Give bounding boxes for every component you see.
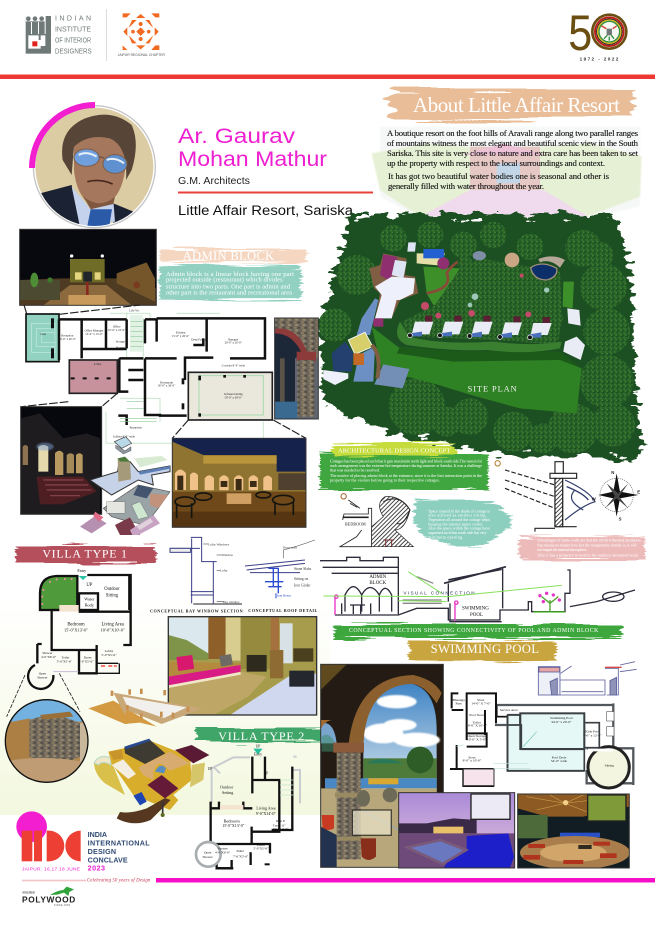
- room labels: 13'-0" x 13'-0": [85, 332, 103, 336]
- logo: Jaipur regional chapter: [118, 13, 166, 57]
- outer trees: [318, 222, 635, 453]
- room labels: Office: [113, 325, 121, 329]
- hedge: [397, 322, 562, 352]
- pale landscape lines: [106, 312, 263, 443]
- description: [387, 128, 639, 191]
- foundation model: [88, 689, 202, 727]
- pool floor plan: 54'-0" wide: [551, 759, 567, 763]
- faint villa background wash: [0, 600, 330, 815]
- isometric admin model: [80, 437, 170, 535]
- conclave title: 2023: [88, 865, 105, 873]
- sketch captions: CONCEPTUAL BAY WINDOW SECTION: [150, 609, 243, 614]
- logo: Indian Institute of Interior Designers: OF INTERIOR: [55, 37, 91, 44]
- lobby: [69, 360, 117, 393]
- site plan label: SITE PLAN: [468, 384, 517, 393]
- shade description: minimum opening.: [428, 534, 463, 539]
- shade text brush: [415, 500, 512, 545]
- photo: lobby night: [21, 407, 102, 514]
- room labels: 50'-0" x 28'-0": [225, 395, 243, 399]
- roof detail sketch: Slope with: [283, 545, 297, 549]
- icon: compass: N: [611, 470, 614, 475]
- photo leader lines: [22, 305, 306, 438]
- villa 2 plan: Rest 6': [276, 819, 286, 823]
- cottages: [408, 308, 585, 360]
- room labels: Reception: [61, 334, 74, 338]
- footer thin line: [22, 880, 86, 881]
- room labels: Restaurant: [160, 380, 173, 384]
- villa 2 plan: Toilet: [236, 849, 244, 853]
- conclave title: CONCLAVE: [88, 856, 128, 864]
- shade description: also utilised as outdoor sitting.: [428, 513, 487, 518]
- roof detail sketch: Stone Slabs: [294, 567, 312, 571]
- photo: arch view: [321, 664, 443, 867]
- villa 2 plan: 5'-0"X5'-6": [253, 847, 269, 851]
- panel: swimming pool: [321, 662, 637, 869]
- section caption: CONCEPTUAL SECTION SHOWING CONNECTIVITY OF POOL AND ADMIN BLOCK: [349, 628, 599, 634]
- pool floor plan: Service Area: [500, 708, 518, 712]
- panel: admin block: [20, 229, 318, 527]
- photo: amphitheatre at night: [518, 794, 630, 869]
- villa 1 plan: Open: [39, 671, 46, 675]
- pool floor plan: Open Storage: [467, 734, 487, 738]
- icon: compass: S: [619, 517, 622, 522]
- pool floor plan: Toilet: [473, 720, 481, 724]
- wall description: that means no matter how hot the temperature outside is, it will: [537, 542, 637, 548]
- stairs: [120, 322, 157, 422]
- logo: Indian Institute of Interior Designers: [26, 16, 92, 55]
- sponsor: Polywood: POLYWOOD: [22, 894, 75, 904]
- room labels: Reception: [130, 425, 142, 429]
- shade description: Space created in the shade of cottage is: [428, 508, 490, 513]
- admin description: [166, 271, 294, 297]
- tree mass: [320, 215, 645, 458]
- villa 1 plan: Lobby: [105, 649, 114, 653]
- room labels: Corridor 8'-0" wide: [222, 364, 246, 368]
- pool floor plan: 7'-0" x 12'-0": [583, 733, 602, 737]
- panel: villa type 1: [7, 537, 318, 727]
- villa 1 plan: Dress: [84, 656, 92, 660]
- villa 2 plan: UP: [264, 771, 268, 775]
- room labels: Lobby: [94, 362, 102, 366]
- room labels: Softened sitting: [224, 392, 243, 396]
- villa 1 plan: 5'-6"X5'-6": [57, 660, 73, 664]
- concept description: property for the visitors before going to their respective cottages.: [330, 478, 440, 483]
- section caption brush: [335, 624, 622, 638]
- pool floor plan: Kids Pool: [585, 730, 599, 734]
- red path: [427, 262, 458, 293]
- sunglasses: [74, 149, 99, 166]
- villa 2 plan: Setting: [222, 790, 233, 795]
- villa 1 plan: 5'-6"X5'-6": [78, 660, 94, 664]
- swimming pool brush: [409, 642, 556, 661]
- room labels: [41, 309, 246, 439]
- pool floor plan: 10'-0" X 10'-0": [466, 724, 488, 728]
- logo: 50 years: 1972 - 2022: [580, 56, 619, 61]
- pool sketch: [538, 662, 637, 695]
- villa 1 plan: Shower: [42, 651, 53, 655]
- shade description: organised such that south side has very: [428, 530, 487, 535]
- face: [74, 137, 126, 204]
- conclave dates: JAIPUR. 16.17.18 JUNE: [22, 867, 81, 873]
- pool floor plan: 14'-0" X 7'-0": [471, 702, 491, 706]
- logo: 50 years: 5: [568, 5, 592, 61]
- concept heading: ARCHITECTURAL DESIGN CONCEPT: [338, 448, 450, 455]
- room labels: Gate: [41, 332, 47, 336]
- sponsor: Polywood: SINCE 1982: [54, 905, 71, 907]
- bay window sketch: Lofty Windows: [208, 542, 230, 546]
- heading: About Little Affair Resort: [413, 93, 620, 117]
- author name: Mohan Mathur: [178, 148, 327, 171]
- villa 1 plan: UP: [86, 583, 93, 588]
- villa 2 plan: Outdoor: [220, 785, 234, 790]
- description: Sariska. This site is very close to nature and extra care has been taken to set: [387, 148, 639, 158]
- sponsor: Polywood: [22, 887, 75, 907]
- bay window sketch: Lofty: [220, 569, 228, 573]
- sketch: connectivity section: POOL: [470, 613, 483, 618]
- pool floor plan: Pass: [456, 702, 462, 706]
- photo: courtyard night: [172, 438, 306, 527]
- jacket: [41, 185, 133, 224]
- villa 1 plan: [28, 568, 131, 689]
- room labels: Banquet: [228, 337, 238, 341]
- panel: site plan: [318, 215, 645, 458]
- villa 1 plan: 15'-0"X13'-0": [64, 627, 88, 632]
- icon: compass: E: [637, 489, 640, 494]
- villa 2 plan: Shower: [218, 846, 229, 850]
- concept heading brush: [332, 443, 457, 457]
- pool floor plan: Pool Deck: [552, 755, 567, 759]
- room labels: 30'-0" x 36'-0": [158, 384, 176, 388]
- conclave title: INTERNATIONAL: [88, 840, 150, 848]
- heading: VILLA TYPE 2: [218, 729, 304, 743]
- courtyard: [188, 372, 272, 420]
- pool floor plan: 34'-0" x 20'-0": [551, 720, 572, 724]
- shade description: Also the space within the cottage have: [428, 526, 490, 531]
- flowering shrubs: [421, 274, 531, 319]
- villa 2 plan: Dress: [257, 843, 265, 847]
- conclave title: INDIA: [88, 831, 107, 839]
- villa 2 plan: 7'-6"X5'-6": [233, 854, 249, 858]
- villa 1 plan: 4'-0"X6'-6": [41, 655, 57, 659]
- panel: circular stone detail photo: [3, 698, 90, 785]
- sketch: connectivity section: ADMIN: [369, 575, 387, 580]
- sketch: cottage shade: [340, 494, 413, 547]
- villa 2 plan: 4'-0"X6'-0": [215, 850, 231, 854]
- admin and main buildings: [369, 253, 418, 318]
- concept description: Cottages has been placed such that it gets maximum north light and block south side.The reason for: [330, 458, 483, 463]
- wall description: Advantages of stone walls are that the act as a thermal insulation: [537, 538, 642, 543]
- description: It has got two beautiful water bodies one is seasonal and other is: [388, 171, 610, 181]
- villa 2 plan: Open: [204, 851, 212, 855]
- panel: conclave footer: [16, 811, 151, 907]
- concept description: such arrangement was the extreme hot temperature during summer at Sariska. It was a challenge: [330, 463, 482, 468]
- villa 2 plan: Entry: [254, 752, 262, 756]
- panel: design concept: [320, 443, 645, 661]
- pool floor plan: Store: [477, 698, 485, 702]
- glass restaurant wing: [357, 298, 378, 335]
- heading brush: [390, 93, 633, 120]
- concept text brush: [320, 453, 488, 490]
- villa 2 plan: UP: [208, 767, 212, 771]
- sketch: connectivity section: SWIMMING: [462, 606, 489, 611]
- villa 2 plan: 15'-0"X13'-0": [222, 823, 245, 828]
- room labels: Lift/ Wc: [129, 309, 140, 313]
- panel: villa type 2: [195, 728, 327, 868]
- heading brush: [160, 249, 307, 262]
- room labels: 16'-0" x 20'-0": [59, 337, 77, 341]
- description: of mountains witness the most elegant and beautiful scenic view in the South: [387, 138, 639, 148]
- villa 2 plan: [196, 744, 300, 868]
- description: up the property with respect to the local surroundings and context.: [387, 158, 605, 168]
- admin description: other part is the restaurant and recreational area: [166, 290, 292, 297]
- villa 2 plan: Bedroom: [224, 819, 240, 824]
- red rule under firm: [178, 192, 373, 194]
- sketch: connectivity section: [320, 557, 635, 622]
- sketch: connectivity section: VISUAL CONNECTION: [403, 590, 475, 595]
- bay window sketch: Bay window: [223, 600, 240, 604]
- columns: [51, 318, 246, 417]
- conclave title: [88, 831, 150, 873]
- villa 1 plan: Toilet: [61, 656, 69, 660]
- sketch: cottage shade: BEDROOM: [345, 521, 366, 526]
- roof detail sketch: Iron Beam: [277, 594, 291, 598]
- wall description: not impart the internal atmosphere.: [537, 547, 587, 552]
- admin description: Admin block is a linear block having one part: [166, 271, 294, 278]
- logo: 50 years: [568, 5, 626, 61]
- project title: Little Affair Resort, Sariska: [178, 203, 354, 218]
- walls: [59, 318, 265, 425]
- admin description: structure into two parts. One part is admin and: [166, 283, 291, 290]
- pool floor plan: 10'-0" X 5'-0": [467, 737, 487, 741]
- portrait: [33, 106, 155, 228]
- logo: Jaipur regional chapter: JAIPUR REGIONAL CHAPTER: [118, 53, 166, 57]
- villa 2 plan: UP: [256, 744, 260, 748]
- heading: ADMIN BLOCK: [183, 249, 275, 263]
- panel: villa type 1: CONCEPTUAL ROOF DETAIL: [248, 608, 318, 613]
- concept description: [330, 458, 483, 483]
- villa 2 plan: Width 3'-0": [273, 827, 289, 831]
- panel: about resort: [372, 93, 642, 218]
- shade description: [428, 508, 490, 539]
- bay window sketch: Window: [222, 553, 234, 557]
- sketch: stone wall section: [495, 461, 595, 532]
- description: A boutique resort on the foot hills of Aravali range along two parallel ranges: [387, 128, 639, 138]
- photo: stone arch: [275, 318, 318, 419]
- pool floor plan: [450, 693, 633, 788]
- photo: pool at dusk: [399, 793, 515, 868]
- wall description: Also it has a property to restrict the outdoor unwanted noise.: [537, 553, 639, 558]
- icon: compass: [592, 470, 640, 522]
- circular detail leader: [7, 673, 80, 717]
- pool and amphitheatre: [531, 264, 557, 280]
- upper lawn: [423, 267, 574, 308]
- pool floor plan: Store: [468, 755, 476, 759]
- logo: Indian Institute of Interior Designers: INSTITUTE: [55, 27, 91, 34]
- heading: VILLA TYPE 1: [42, 547, 127, 561]
- room labels: Office Manager: [85, 329, 103, 333]
- room labels: Gallery 8'-0" wide: [113, 435, 136, 439]
- villa 1 plan: Sitting: [106, 594, 119, 599]
- pool floor plan: Swimming Pool: [550, 716, 573, 720]
- header logos: [26, 5, 626, 61]
- villa 2 plan: 9'-0"X14'-0": [256, 811, 276, 816]
- villa 1 plan: Water: [84, 597, 95, 602]
- pool floor plan: Pool Store: [469, 713, 484, 717]
- roof detail sketch: Sitting on: [294, 577, 308, 581]
- swimming pool heading: SWIMMING POOL: [431, 642, 539, 656]
- admin description: projected outside (restaurant) which divides: [166, 277, 283, 284]
- logo: Indian Institute of Interior Designers: DESIGNERS: [55, 48, 92, 55]
- shade description: Vegetation all around the cottage helps: [428, 517, 490, 522]
- conclave title: DESIGN: [88, 848, 116, 856]
- author name: Ar. Gaurav: [178, 125, 296, 148]
- villa 1 plan: 10'-0"X10'-0": [101, 627, 125, 632]
- villa 1 plan: Shower: [37, 676, 48, 680]
- icon: compass: W: [592, 497, 597, 502]
- tagline: Celebrating 50 years of Design: [87, 879, 151, 884]
- footer pink rule: [156, 878, 655, 882]
- room labels: Storage: [116, 345, 126, 349]
- shirt: [72, 187, 115, 227]
- heading brush: [195, 728, 327, 742]
- roof detail sketch: Iron Girder: [294, 584, 311, 588]
- pool floor plan: 8'-0" x 10'-0": [463, 759, 482, 763]
- room labels: 20'-0" x 20'-0": [225, 341, 243, 345]
- villa 2 plan: Shower: [203, 855, 214, 859]
- pool floor plan: Bhaanga: [453, 698, 465, 702]
- shade description: keeping the interior space cooler.: [428, 521, 483, 526]
- sketch: connectivity section: BLOCK: [369, 581, 387, 586]
- author name: [178, 125, 327, 171]
- floor plan: [26, 309, 272, 443]
- villa 1 plan: Outdoor: [104, 587, 120, 592]
- room labels: Deep Fridge: [191, 337, 207, 341]
- text brush: [159, 266, 301, 300]
- sponsor: Polywood: SPONSORED BY: [22, 892, 36, 894]
- concept description: The motive of placing admin block at the entrance, since it is the first interaction point in the: [330, 473, 482, 479]
- villa 1 plan: Living Area: [101, 623, 124, 628]
- wall text brush: [520, 537, 645, 560]
- tie: [87, 209, 112, 226]
- photo: admin night view: [20, 229, 157, 305]
- firm name: G.M. Architects: [178, 176, 250, 187]
- concept description: that was needed to be resolved.: [330, 468, 380, 473]
- villa 1 plan: Entry: [77, 568, 86, 573]
- teal room: [26, 314, 59, 362]
- logo: Indian Institute of Interior Designers: INDIAN: [55, 16, 91, 23]
- pool floor plan: Sitting: [605, 764, 614, 768]
- divider: [106, 9, 107, 61]
- roof detail sketch: [245, 540, 315, 598]
- villa 1 plan: 5'-0"X5'-6": [101, 653, 117, 657]
- wall description: [537, 538, 642, 558]
- heading brush: [16, 546, 156, 563]
- hedge shadow: [397, 347, 582, 368]
- photo: villa bedroom: [168, 617, 317, 715]
- villa 2 plan: Living Area: [256, 805, 276, 810]
- faint resort render behind text: [372, 127, 642, 218]
- villa 1 plan: Body: [85, 603, 95, 608]
- room labels: Storage: [116, 339, 126, 343]
- room labels: 15'-0" x 20'-0": [172, 334, 190, 338]
- hair: [62, 115, 136, 180]
- room labels: 10'-0" x 10'-0": [108, 328, 126, 332]
- neck shade: [83, 197, 115, 209]
- top red rule: [0, 74, 655, 79]
- villa 1 plan: Bedroom: [67, 623, 85, 628]
- main lawn: [372, 327, 582, 413]
- central trees: [402, 256, 563, 345]
- villa 3D cutaway model: [94, 739, 209, 823]
- room labels: Kitchen: [176, 331, 186, 335]
- description: generally filled with water throughout the year.: [388, 181, 544, 191]
- bay window sketch: [170, 537, 242, 604]
- logo: IIDC: [16, 811, 81, 861]
- portrait pink arc: [32, 105, 95, 168]
- villa 2 plan: Tread 11": [273, 823, 286, 827]
